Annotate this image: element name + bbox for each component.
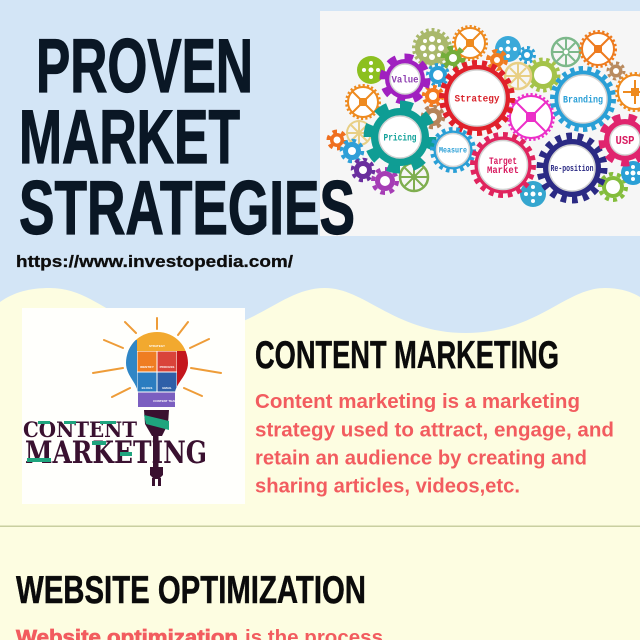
gear: small blue xyxy=(520,48,534,62)
gear: tan wheel left xyxy=(347,121,371,145)
gear: blue dotted bottom xyxy=(520,181,546,207)
text block: content marketing description: strategy used to attract, engage, and xyxy=(255,420,614,442)
text block: content marketing description: sharing articles, videos,etc. xyxy=(255,476,520,498)
gear: strategy xyxy=(442,63,512,133)
icon: light rays xyxy=(93,318,221,397)
icon: puzzle light bulb: CONTENT TEAM xyxy=(153,399,177,403)
title: PROVEN xyxy=(36,24,253,109)
gear: green wheel bottom xyxy=(400,163,428,191)
gear: branding: Branding xyxy=(563,94,603,106)
panel: content marketing image xyxy=(22,308,245,504)
gear: magenta wheel xyxy=(508,94,554,140)
gear: violet small xyxy=(373,169,397,193)
gear: target market: Market xyxy=(487,165,519,177)
icon: puzzle light bulb xyxy=(126,332,188,408)
icon: puzzle light bulb: PROCESS xyxy=(160,365,174,369)
title xyxy=(19,24,355,251)
gear: orange spoked right xyxy=(580,32,616,66)
text block: content marketing description xyxy=(255,391,614,498)
gear: usp: USP xyxy=(616,134,634,148)
source url: https://www.investopedia.com/ xyxy=(16,252,293,271)
gear: usp xyxy=(602,116,640,164)
gear: blue dotted right xyxy=(621,161,640,185)
gear: orange spoked top xyxy=(454,26,486,60)
gear: pricing xyxy=(368,105,432,169)
logo text: content marketing: MARKETING xyxy=(25,435,207,471)
icon: puzzle light bulb: BLOGS xyxy=(142,386,152,390)
gear: green dotted xyxy=(357,56,385,84)
heading: website optimization: WEBSITE OPTIMIZATION xyxy=(16,569,366,612)
panel: gears image xyxy=(320,11,640,236)
gear: lime xyxy=(528,60,558,90)
gear: green wheel xyxy=(552,38,580,66)
gear: blue small upper xyxy=(428,64,448,86)
gear: blue small left xyxy=(342,140,362,162)
gear: re-position xyxy=(540,136,604,200)
background: cream wave panel xyxy=(0,288,640,640)
gear: orange spoked edge xyxy=(616,74,640,110)
logo text: content marketing: CONTENT xyxy=(23,417,137,442)
gear: brown small xyxy=(608,63,624,79)
gear: brown mid xyxy=(422,106,444,128)
text block: website optimization description xyxy=(16,627,383,640)
gear: orange small top xyxy=(488,51,506,69)
icon: puzzle light bulb: STRATEGY xyxy=(149,344,165,348)
gear: measure xyxy=(432,129,474,171)
gear: orange small left xyxy=(328,132,346,148)
gear: green clover xyxy=(443,48,463,68)
gear: measure: Measure xyxy=(439,146,467,156)
text block: content marketing description: Content marketing is a marketing xyxy=(255,391,580,413)
gear: orange mid xyxy=(424,86,442,106)
gear: re-position: Re-position xyxy=(550,164,594,174)
gear: tan wheel xyxy=(505,63,531,89)
icon: puzzle light bulb: IDENTIFY xyxy=(140,365,154,369)
gear: orange spoked left xyxy=(346,86,380,118)
gear: target market xyxy=(472,134,534,196)
gear: light blue dotted xyxy=(495,36,521,62)
gear: value: Value xyxy=(392,74,418,86)
gear: green bottom right xyxy=(600,174,626,200)
gear: olive dotted xyxy=(414,30,450,66)
title: STRATEGIES xyxy=(19,166,355,251)
icon: puzzle light bulb: EMAIL xyxy=(162,386,172,390)
gear: target market: Target xyxy=(489,157,517,168)
gear: pricing: Pricing xyxy=(384,132,416,144)
title: MARKET xyxy=(19,95,240,180)
logo text: content marketing xyxy=(23,417,207,471)
gear: branding xyxy=(552,68,614,130)
text block: content marketing description: retain an audience by creating and xyxy=(255,448,587,470)
gear: strategy: Strategy xyxy=(454,94,500,106)
gear: dark purple small xyxy=(352,160,374,180)
icon: bulb screw and cord xyxy=(144,410,169,486)
gear: value xyxy=(382,56,428,102)
